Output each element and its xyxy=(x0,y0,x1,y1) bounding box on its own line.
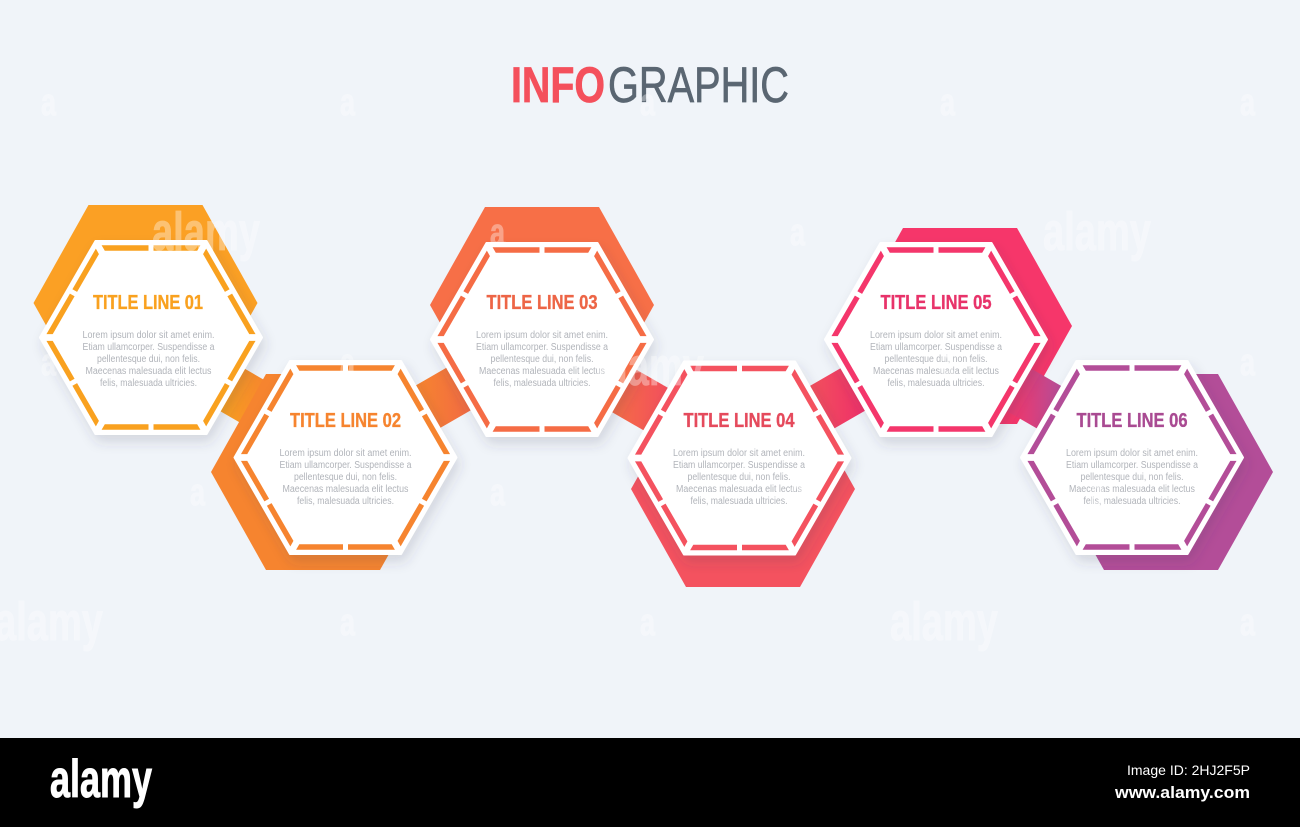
watermarks: a xyxy=(340,342,356,384)
body text 06: pellentesque dui, non felis. xyxy=(1080,472,1184,483)
panel: step 02 xyxy=(211,356,492,570)
heading 06: TITLE LINE 06 xyxy=(1076,410,1188,432)
body text 03: Maecenas malesuada elit lectus xyxy=(479,366,605,377)
watermarks: a xyxy=(490,472,506,514)
body text 04: felis, malesuada ultricies. xyxy=(690,496,788,507)
watermarks: a xyxy=(340,82,356,124)
body text 02 xyxy=(280,448,412,507)
panel: step 03 xyxy=(430,207,689,442)
body text 01 xyxy=(82,330,215,389)
watermarks: a xyxy=(1240,602,1256,644)
body text 05: Lorem ipsum dolor sit amet enim. xyxy=(870,330,1002,341)
image id: Image ID: 2HJ2F5P xyxy=(1127,762,1250,778)
back hexagon 03 xyxy=(430,207,654,403)
body text 02: pellentesque dui, non felis. xyxy=(294,472,397,483)
watermarks: a xyxy=(640,602,656,644)
footer bar xyxy=(0,738,1300,827)
white hexagon 02 xyxy=(234,361,456,554)
body text 05: pellentesque dui, non felis. xyxy=(884,354,988,365)
watermarks: a xyxy=(1240,342,1256,384)
body text 04 xyxy=(673,448,805,507)
body text 03: Etiam ullamcorper. Suspendisse a xyxy=(476,342,608,353)
heading 03: TITLE LINE 03 xyxy=(486,292,598,314)
dashed border 03 xyxy=(437,247,647,432)
watermarks: a xyxy=(490,212,506,254)
connector 04 to 05 xyxy=(789,356,887,440)
body text 05 xyxy=(870,330,1002,389)
title: GRAPHIC xyxy=(608,57,789,113)
footer logo: alamy xyxy=(50,750,152,809)
white hexagon 04 xyxy=(628,362,850,554)
body text 01: pellentesque dui, non felis. xyxy=(97,354,200,365)
body text 05: Maecenas malesuada elit lectus xyxy=(873,366,999,377)
watermarks: a xyxy=(190,472,206,514)
dashed border 06 xyxy=(1027,365,1237,550)
watermarks: a xyxy=(790,472,806,514)
watermarks xyxy=(0,82,1256,652)
dashed border 04 xyxy=(635,366,844,550)
watermarks: alamy xyxy=(1043,202,1151,262)
panel: step 01 xyxy=(34,205,292,438)
white hexagon 06 xyxy=(1021,361,1243,554)
white hexagon 03 xyxy=(431,243,653,436)
body text 05: Etiam ullamcorper. Suspendisse a xyxy=(870,342,1002,353)
body text 02: Lorem ipsum dolor sit amet enim. xyxy=(280,448,412,459)
body text 01: Maecenas malesuada elit lectus xyxy=(86,366,212,377)
panel: step 04 xyxy=(628,356,887,587)
heading 01: TITLE LINE 01 xyxy=(93,292,203,314)
watermarks: a xyxy=(640,82,656,124)
back hexagon 01 xyxy=(34,205,258,401)
back hexagon 04 xyxy=(631,391,855,587)
heading 05: TITLE LINE 05 xyxy=(880,292,992,314)
watermarks: a xyxy=(1240,82,1256,124)
watermarks: alamy xyxy=(152,202,260,262)
body text 03 xyxy=(476,330,608,389)
body text 06: Lorem ipsum dolor sit amet enim. xyxy=(1066,448,1198,459)
white hexagon 05 xyxy=(825,243,1047,436)
watermarks: alamy xyxy=(596,337,704,397)
website: www.alamy.com xyxy=(1114,783,1250,802)
back hexagon 02 xyxy=(211,374,435,570)
heading 04: TITLE LINE 04 xyxy=(684,410,795,432)
body text 02: Maecenas malesuada elit lectus xyxy=(282,484,408,495)
watermarks: a xyxy=(41,82,57,124)
watermarks: a xyxy=(340,602,356,644)
body text 06: felis, malesuada ultricies. xyxy=(1084,496,1180,507)
watermarks: a xyxy=(940,342,956,384)
body text 01: Etiam ullamcorper. Suspendisse a xyxy=(82,342,215,353)
body text 02: Etiam ullamcorper. Suspendisse a xyxy=(280,460,412,471)
heading 02: TITLE LINE 02 xyxy=(290,410,401,432)
watermarks: a xyxy=(790,212,806,254)
watermarks: a xyxy=(41,342,57,384)
watermarks: a xyxy=(940,82,956,124)
watermarks: a xyxy=(1090,472,1106,514)
body text 04: pellentesque dui, non felis. xyxy=(688,472,790,483)
body text 05: felis, malesuada ultricies. xyxy=(888,378,984,389)
back hexagon 05 xyxy=(848,228,1072,424)
body text 01: felis, malesuada ultricies. xyxy=(100,378,197,389)
panel: step 05 xyxy=(825,228,1089,444)
body text 02: felis, malesuada ultricies. xyxy=(297,496,394,507)
connector 02 to 03 xyxy=(394,356,492,440)
body text 06: Etiam ullamcorper. Suspendisse a xyxy=(1066,460,1198,471)
body text 04: Etiam ullamcorper. Suspendisse a xyxy=(673,460,805,471)
dashed border 01 xyxy=(46,245,256,430)
dashed border 05 xyxy=(831,247,1041,432)
connector 01 to 02 xyxy=(194,354,292,438)
connector 05 to 06 xyxy=(991,360,1089,444)
body text 03: pellentesque dui, non felis. xyxy=(490,354,594,365)
back hexagon 06 xyxy=(1049,374,1273,570)
body text 04: Lorem ipsum dolor sit amet enim. xyxy=(673,448,805,459)
white hexagon 01 xyxy=(40,241,262,434)
title xyxy=(511,57,789,113)
body text 04: Maecenas malesuada elit lectus xyxy=(676,484,802,495)
body text 03: felis, malesuada ultricies. xyxy=(494,378,590,389)
body text 03: Lorem ipsum dolor sit amet enim. xyxy=(476,330,608,341)
title: INFO xyxy=(511,57,605,113)
watermarks: alamy xyxy=(890,592,998,652)
body text 01: Lorem ipsum dolor sit amet enim. xyxy=(82,330,214,341)
body text 06: Maecenas malesuada elit lectus xyxy=(1069,484,1195,495)
body text 06 xyxy=(1066,448,1198,507)
panel: step 06 xyxy=(1021,361,1273,570)
connector 03 to 04 xyxy=(591,358,689,442)
dashed border 02 xyxy=(241,365,450,550)
